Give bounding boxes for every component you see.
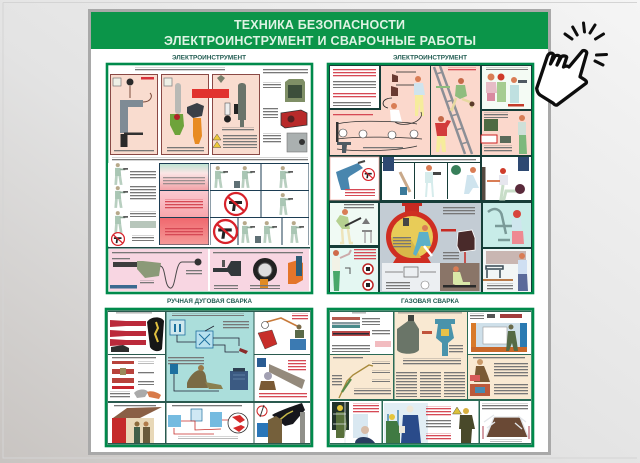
- title banner: [91, 12, 548, 49]
- heading: arc welding: РУЧНАЯ ДУГОВАЯ СВАРКА: [167, 298, 252, 305]
- heading: right top: ЭЛЕКТРОИНСТРУМЕНТ: [393, 54, 467, 62]
- pink box: class II saw and grinder: [162, 74, 208, 154]
- plate welding scene: [254, 355, 310, 401]
- panel: power tools left: [107, 64, 312, 293]
- icon: pointing hand: [537, 23, 606, 105]
- mint tool panel: [483, 203, 531, 247]
- left column with posture rules: [108, 163, 158, 246]
- divider: [108, 247, 310, 248]
- scaffold worker: [330, 401, 382, 443]
- pink box: class I drill: [110, 74, 158, 154]
- title banner: ЭЛЕКТРОИНСТРУМЕНТ И СВАРОЧНЫЕ РАБОТЫ: [164, 34, 476, 48]
- drill warning panel: [330, 157, 379, 200]
- safe supplies column: [263, 68, 308, 152]
- intro line row: [112, 157, 308, 160]
- chainsaw panel: [330, 203, 378, 245]
- gray vessel panel: [380, 203, 481, 292]
- welder at work: [468, 355, 531, 399]
- center column: protection by class: [159, 163, 209, 245]
- pink ladder panel: [431, 66, 480, 155]
- pink box: class III tool: [212, 74, 260, 154]
- heading: left top: ЭЛЕКТРОИНСТРУМЕНТ: [172, 54, 246, 62]
- man at wet wall panel: [482, 157, 531, 200]
- pit scene: [480, 401, 531, 443]
- teal central panel: [166, 312, 254, 401]
- panel: gas welding: [328, 309, 533, 446]
- poster board: [88, 9, 551, 455]
- heading lines: [135, 67, 225, 72]
- white panel: people: [482, 66, 531, 109]
- shed scene: [108, 403, 165, 443]
- workbench panel: [483, 249, 531, 292]
- moisture strip panel: [382, 157, 480, 200]
- pink panel: attachment changing: [210, 249, 309, 291]
- furnace room: [468, 312, 531, 354]
- right grid with figures: [210, 163, 309, 245]
- title banner: ТЕХНИКА БЕЗОПАСНОСТИ: [234, 18, 405, 32]
- pink cable safety panel: [330, 66, 430, 155]
- pink panel: check the drill: [109, 249, 208, 291]
- engineers: [383, 401, 478, 443]
- wiring diagram: [166, 403, 254, 443]
- welder with protective suit: [254, 403, 310, 443]
- pink panel: storage: [481, 111, 531, 155]
- red warning label: [192, 89, 229, 98]
- white-mint figure panel: [330, 248, 378, 292]
- lifting scene: [254, 312, 310, 354]
- electrode holders: [108, 312, 165, 354]
- panel: arc welding: [106, 309, 312, 446]
- cable connectors: [108, 355, 165, 401]
- torch: [330, 355, 393, 399]
- panel: power tools right: [328, 64, 533, 293]
- heading: gas welding: ГАЗОВАЯ СВАРКА: [401, 298, 459, 305]
- hoses chart: [330, 312, 393, 354]
- white rules box: [330, 66, 379, 108]
- cream central panel with generator: [394, 312, 467, 399]
